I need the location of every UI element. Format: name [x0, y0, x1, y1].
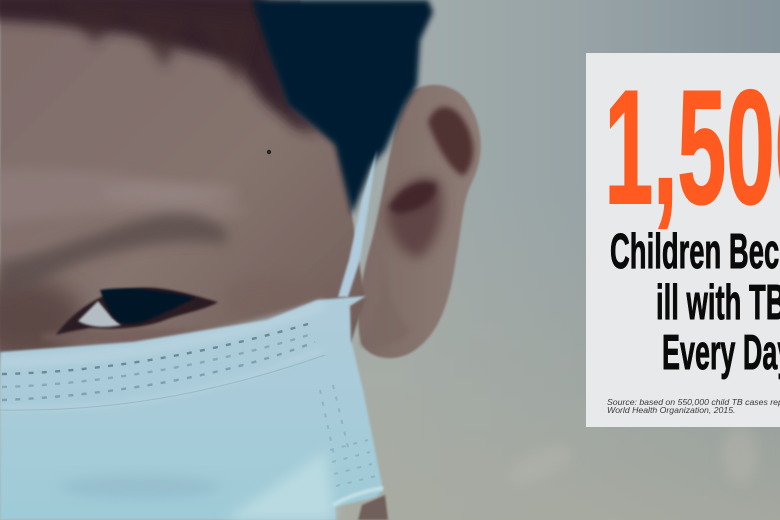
photo: surgical mask [0, 296, 383, 520]
photo: dark hair [252, 0, 433, 215]
mole [267, 150, 271, 154]
photo: child's ear [358, 85, 481, 358]
photo: eyebrow [0, 214, 228, 298]
photo: eye [56, 287, 218, 335]
mask highlight [225, 450, 333, 520]
photo: mask ear strap [338, 150, 377, 297]
panel: white statistic card [586, 53, 780, 427]
photo: child's face [0, 0, 365, 365]
source note: World Health Organization, 2015. [607, 405, 735, 415]
mask pleat stitches [2, 322, 315, 400]
photo: skin below mask [358, 495, 388, 520]
photo: fringe of hair [0, 0, 322, 135]
mask side seam [320, 385, 376, 486]
